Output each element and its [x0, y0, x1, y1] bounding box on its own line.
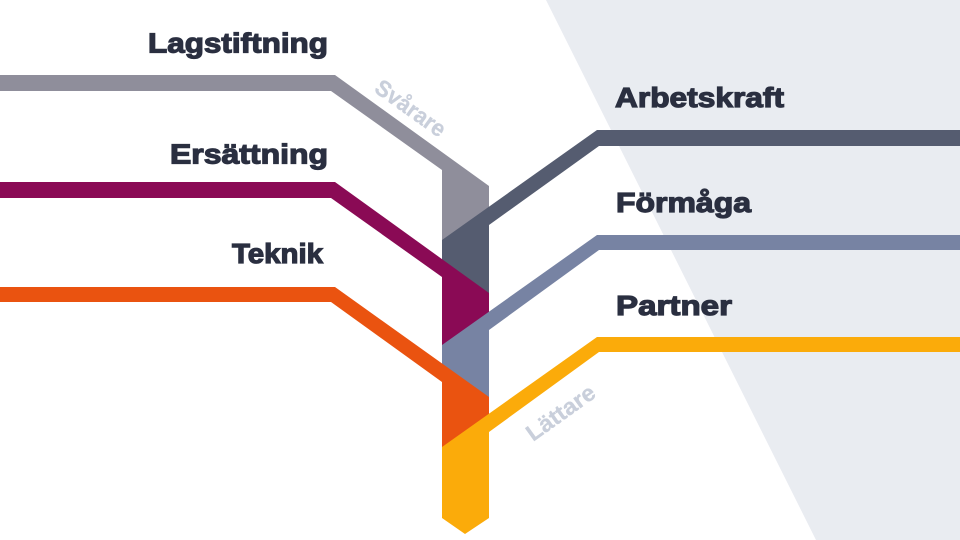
band: Teknik — [0, 287, 489, 470]
heading: Arbetskraft: Arbetskraft — [615, 82, 784, 113]
band: Partner — [442, 337, 960, 534]
label: Lättare: Lättare — [521, 379, 600, 446]
band: Arbetskraft — [442, 130, 960, 320]
background panel — [546, 0, 960, 540]
label: Svårare: Svårare — [370, 74, 451, 142]
band: Lagstiftning — [0, 75, 489, 270]
heading: Lagstiftning: Lagstiftning — [148, 28, 328, 58]
heading: Ersättning: Ersättning — [170, 138, 328, 170]
band: Förmåga — [442, 235, 960, 420]
heading: Förmåga: Förmåga — [616, 187, 752, 218]
heading: Teknik: Teknik — [232, 238, 324, 269]
band: Ersättning — [0, 182, 489, 370]
heading: Partner: Partner — [616, 290, 732, 321]
